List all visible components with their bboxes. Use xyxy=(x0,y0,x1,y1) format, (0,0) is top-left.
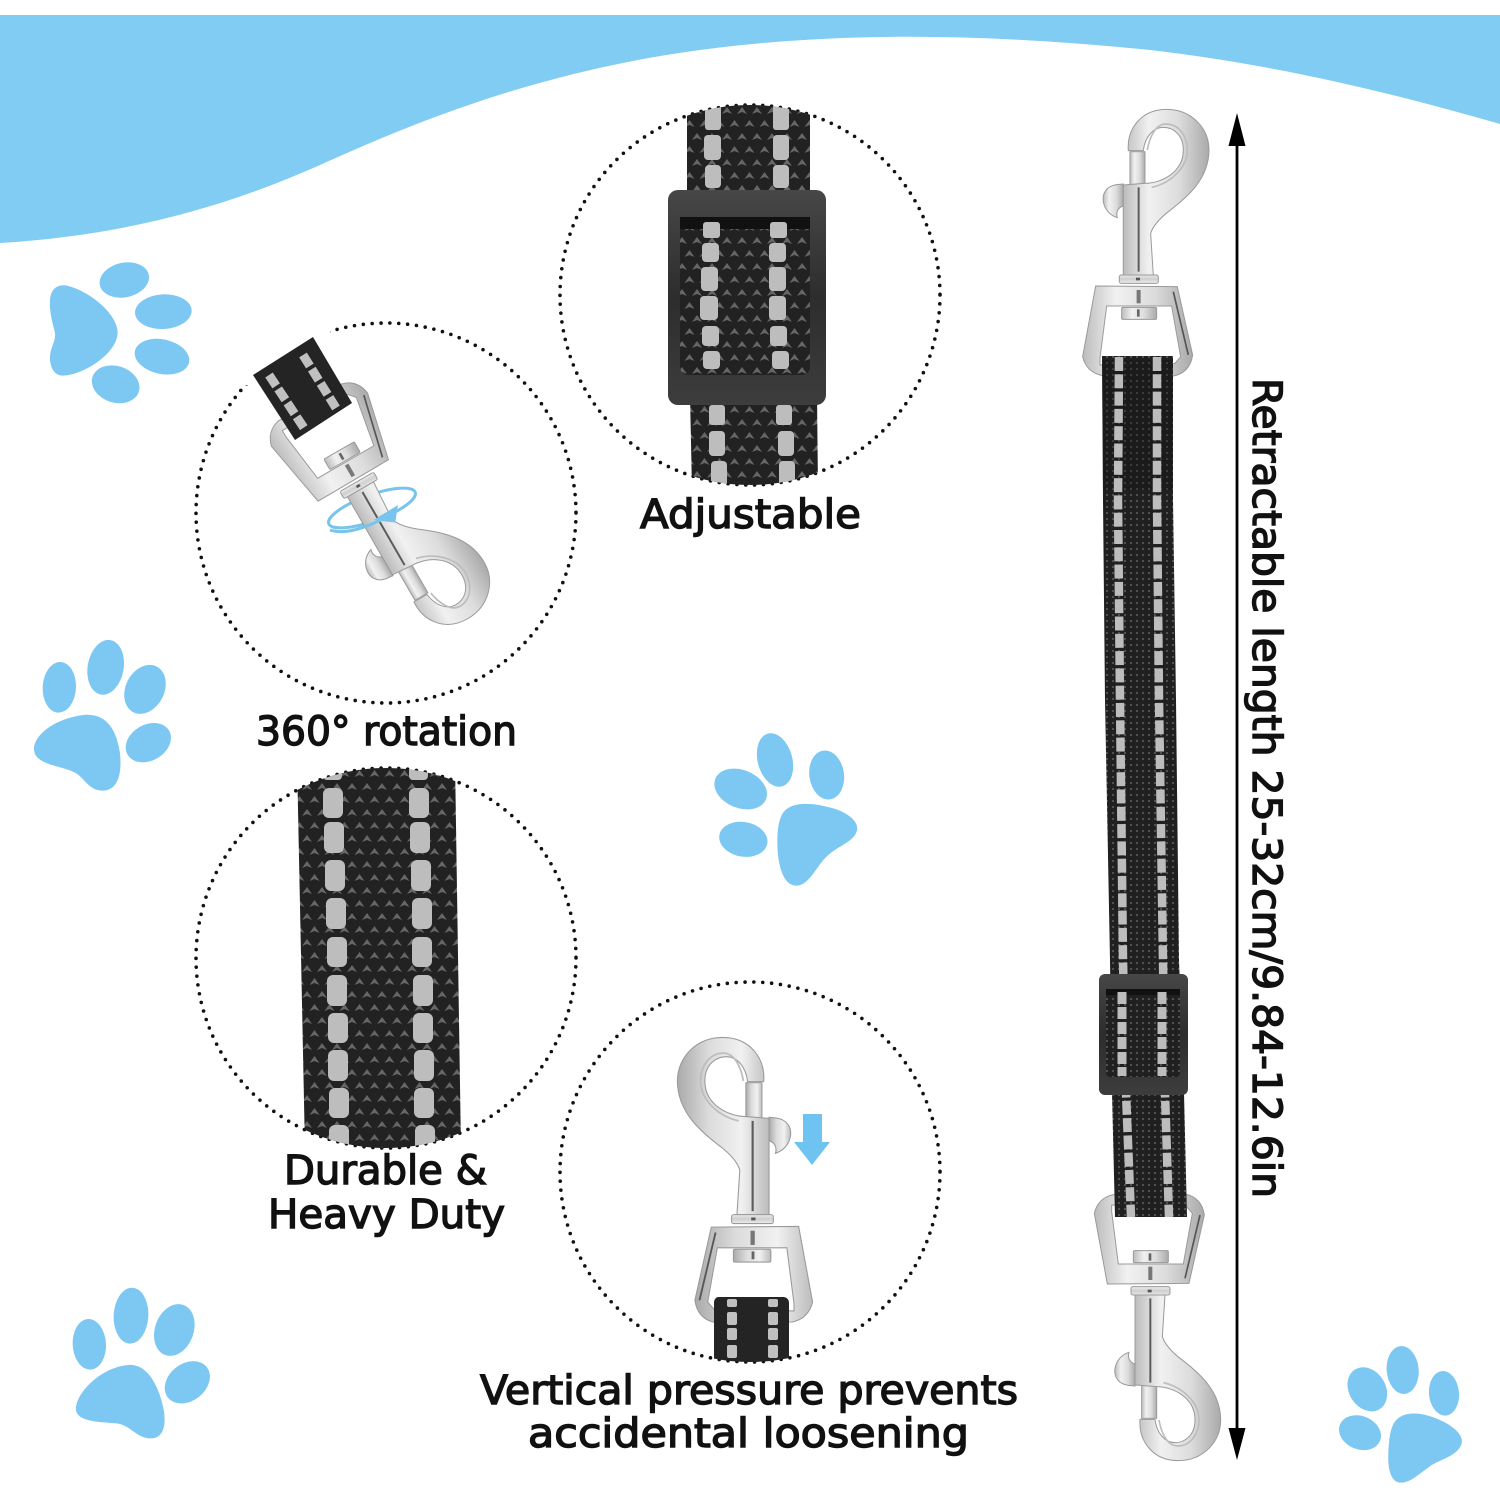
webbing strap xyxy=(1102,356,1187,1217)
icon: paw top left xyxy=(50,258,193,409)
icon: paw middle left xyxy=(34,637,178,791)
snap hook xyxy=(677,1037,813,1323)
icon: paw bottom right xyxy=(1334,1345,1462,1483)
panel: vertical pressure hook xyxy=(560,982,940,1370)
rotation orbit back xyxy=(324,480,420,536)
blue wave header xyxy=(0,15,1500,243)
label: retractable length: Retractable length 25-32cm/9.84-12.6in xyxy=(1243,378,1289,1198)
rotation arrow xyxy=(330,508,396,532)
icon: paw bottom left xyxy=(71,1287,218,1438)
bottom snap hook xyxy=(1094,1194,1221,1461)
label: vertical pressure: Vertical pressure prevents xyxy=(480,1368,1018,1414)
label: Durable and Heavy Duty: Heavy Duty xyxy=(268,1192,505,1238)
panel: adjustable buckle xyxy=(560,100,940,491)
panel: durable webbing xyxy=(196,760,576,1155)
label: vertical pressure: accidental loosening xyxy=(528,1411,969,1457)
blue down arrow xyxy=(794,1114,830,1165)
buckle xyxy=(1099,974,1188,1095)
swivel snap hook xyxy=(262,367,505,661)
label: Durable and Heavy Duty: Durable & xyxy=(284,1148,487,1194)
buckle xyxy=(668,190,826,405)
label: 360 rotation: 360° rotation xyxy=(256,709,517,755)
top snap hook xyxy=(1083,109,1209,376)
label: Durable and Heavy Duty xyxy=(268,1148,505,1238)
arrow: length dimension xyxy=(1228,113,1246,1460)
strap end xyxy=(253,337,352,440)
label: vertical pressure xyxy=(480,1368,1018,1457)
strap end xyxy=(714,1297,789,1362)
panel: 360 degree rotation xyxy=(196,323,576,703)
full product: leash connector xyxy=(1083,109,1221,1461)
label: Adjustable: Adjustable xyxy=(640,492,861,538)
icon: paw center xyxy=(708,729,857,886)
